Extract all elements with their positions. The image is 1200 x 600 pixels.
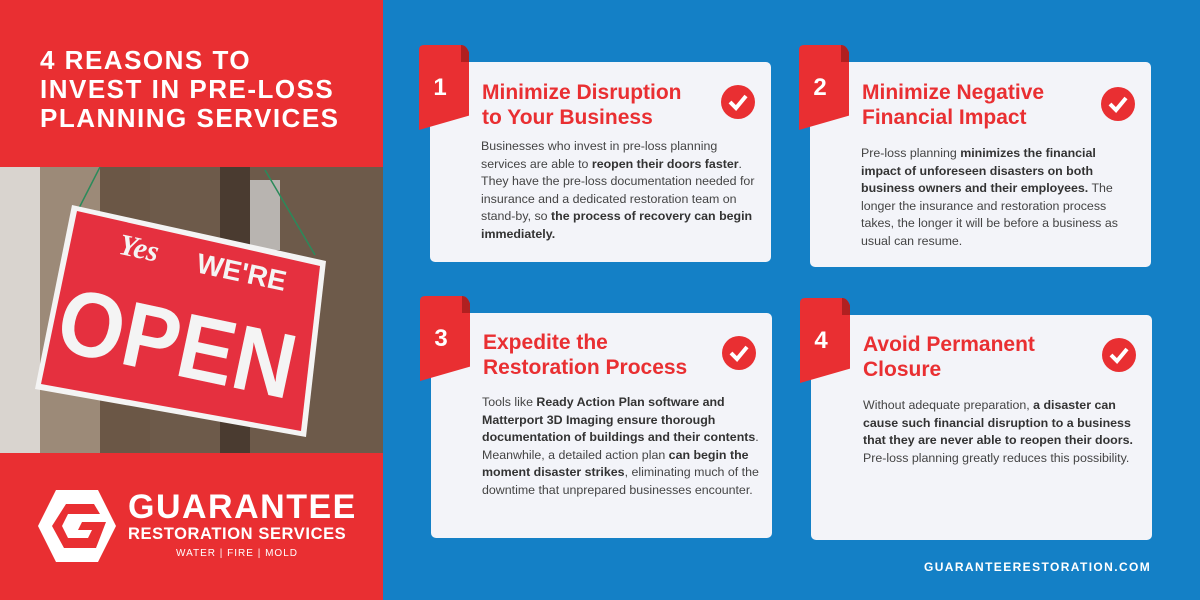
heading 2: Minimize Negative	[862, 81, 1044, 104]
photo: open sign: WE'RE	[194, 248, 289, 297]
tab 2	[799, 45, 849, 130]
title: 4 REASONS TO	[40, 45, 251, 75]
text 1: Businesses who invest in pre-loss planning services are able to reopen their doors faster. They have the pre-loss documentation needed for insurance and a dedicated restoration team on stand-by, so the process of recovery can begin immediately.	[481, 139, 754, 240]
left panel	[0, 0, 383, 600]
photo: open sign: OPEN	[49, 269, 305, 419]
card 1	[430, 62, 771, 262]
icon: logo hexagon	[38, 490, 116, 562]
heading 3: Restoration Process	[483, 356, 687, 379]
tab 4: 4	[814, 327, 828, 354]
title	[40, 45, 340, 133]
card 4	[811, 315, 1152, 540]
text 3: Tools like Ready Action Plan software and Matterport 3D Imaging ensure thorough documentation of buildings and their contents. Meanwhile, a detailed action plan can begin the moment disaster strikes, eliminating much of the downtime that unprepared businesses encounter.	[482, 395, 759, 496]
heading 1: to Your Business	[482, 106, 653, 129]
logo	[38, 488, 357, 562]
icon: check 3	[722, 336, 756, 370]
icon: check 2	[1101, 87, 1135, 121]
text 4: Without adequate preparation, a disaster can cause such financial disruption to a business that they are never able to reopen their doors. Pre-loss planning greatly reduces this possibility.	[863, 398, 1133, 464]
logo: GUARANTEE	[128, 488, 357, 526]
website url: GUARANTEERESTORATION.COM	[924, 560, 1151, 574]
logo: RESTORATION SERVICES	[128, 525, 346, 543]
heading 2	[862, 81, 1044, 129]
text 2: Pre-loss planning minimizes the financial impact of unforeseen disasters on both business owners and their employees. The longer the insurance and restoration process takes, the longer it will be before a business as usual can resume.	[861, 146, 1118, 248]
heading 4	[863, 333, 1035, 381]
heading 1: Minimize Disruption	[482, 81, 682, 104]
icon: check 1	[721, 85, 755, 119]
tab 3: 3	[434, 325, 448, 352]
tab 1: 1	[433, 74, 447, 101]
heading 3	[483, 331, 687, 379]
photo: open sign	[0, 167, 383, 453]
tab 3	[420, 296, 470, 381]
heading 2: Financial Impact	[862, 106, 1027, 129]
card 2	[810, 62, 1151, 267]
heading 4: Closure	[863, 358, 941, 381]
heading 1	[482, 81, 682, 129]
logo: WATER | FIRE | MOLD	[176, 548, 298, 559]
card 3	[431, 313, 772, 538]
photo: open sign: Yes	[116, 228, 162, 269]
icon: check 4	[1102, 338, 1136, 372]
heading 3: Expedite the	[483, 331, 608, 354]
tab 2: 2	[813, 74, 827, 101]
heading 4: Avoid Permanent	[863, 333, 1035, 356]
title: PLANNING SERVICES	[40, 103, 340, 133]
tab 1	[419, 45, 469, 130]
tab 4	[800, 298, 850, 383]
title: INVEST IN PRE-LOSS	[40, 74, 334, 104]
